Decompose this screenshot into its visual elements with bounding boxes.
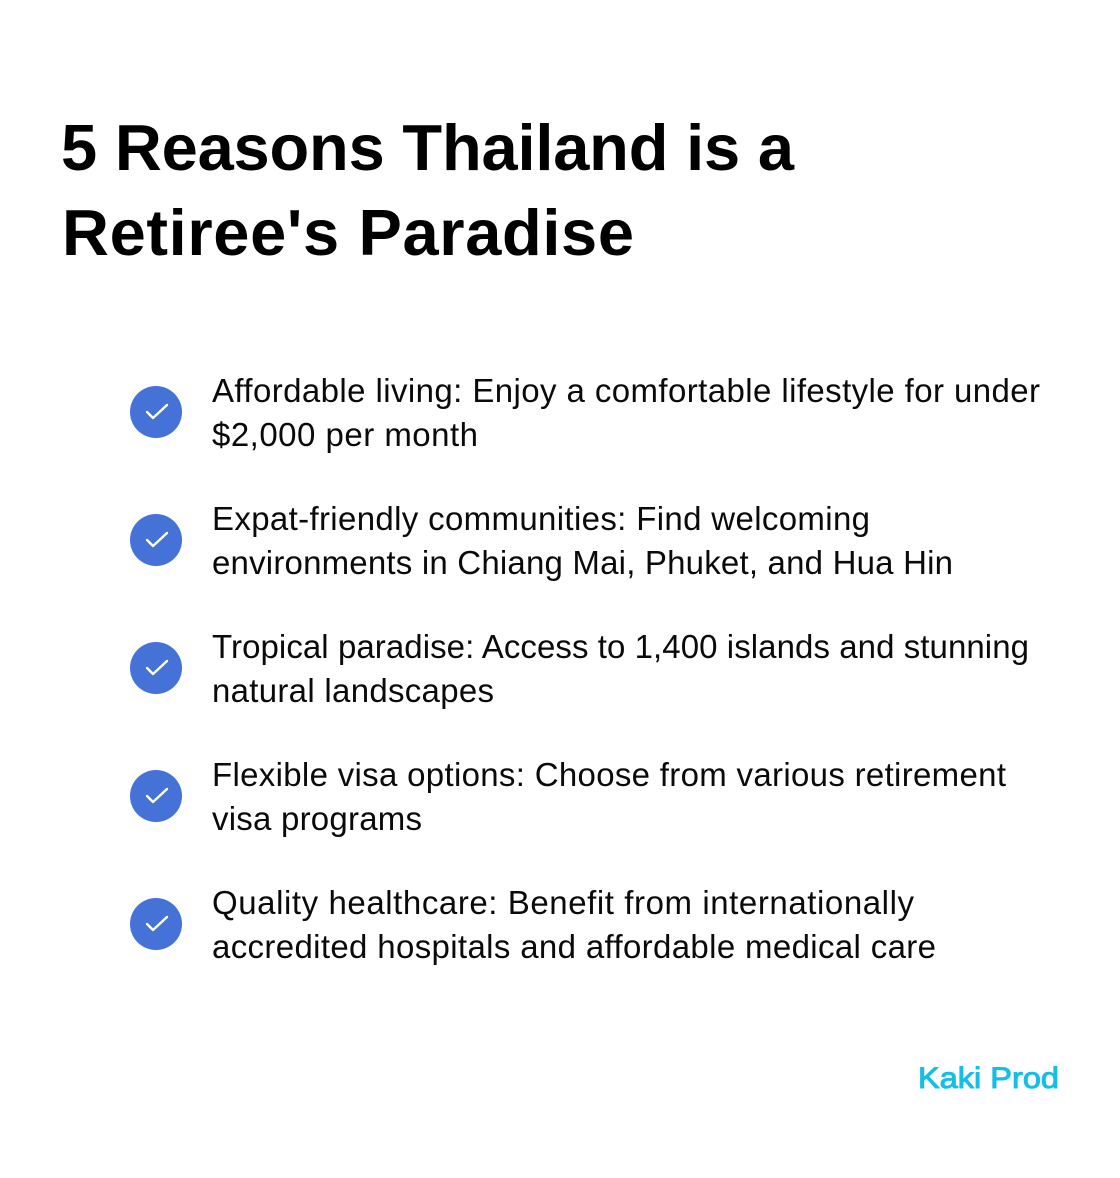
text: tropical paradise: Tropical paradise: Access to 1,400 islands and stunning (212, 628, 1029, 665)
text: tropical paradise: natural landscapes (212, 672, 494, 709)
text: quality healthcare (212, 884, 936, 965)
title: 5 Reasons Thailand is a (61, 111, 795, 184)
text: quality healthcare: Quality healthcare: Benefit from internationally (212, 884, 914, 921)
title: Retiree's Paradise (62, 196, 634, 269)
icon: check badge (130, 386, 182, 438)
list item: quality healthcare (130, 884, 936, 965)
text: flexible visa options (212, 756, 1006, 837)
text: affordable living: Affordable living: Enjoy a comfortable lifestyle for under (212, 372, 1040, 409)
icon: check badge (130, 770, 182, 822)
text: quality healthcare: accredited hospitals and affordable medical care (212, 928, 936, 965)
text: expat-friendly communities: Expat-friendly communities: Find welcoming (212, 500, 870, 537)
text: expat-friendly communities: environments in Chiang Mai, Phuket, and Hua Hin (212, 544, 953, 581)
list item: flexible visa options (130, 756, 1006, 837)
icon: check badge (130, 642, 182, 694)
text: flexible visa options: Flexible visa options: Choose from various retirement (212, 756, 1006, 793)
list item: affordable living (130, 372, 1040, 453)
list item: tropical paradise (130, 628, 1029, 709)
list item: expat-friendly communities (130, 500, 953, 581)
logo: Kaki Prod: Kaki Prod (918, 1062, 1059, 1095)
text: expat-friendly communities (212, 500, 953, 581)
text: tropical paradise (212, 628, 1029, 709)
icon: check badge (130, 514, 182, 566)
icon: check badge (130, 898, 182, 950)
text: flexible visa options: visa programs (212, 800, 422, 837)
text: affordable living: $2,000 per month (212, 416, 478, 453)
title (61, 111, 795, 269)
text: affordable living (212, 372, 1040, 453)
